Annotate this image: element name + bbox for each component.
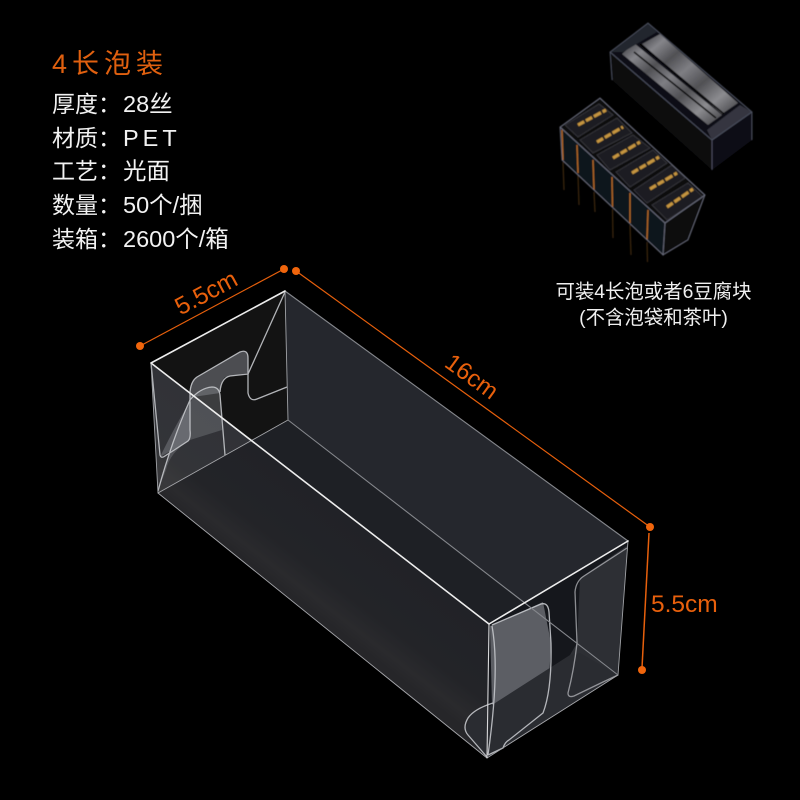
photo: box with tofu blocks [560,98,705,262]
photo: box with tea bags [610,23,752,170]
title: 4长泡装 [52,49,168,79]
box right end [487,541,628,758]
spec: carton: 2600个/箱 [123,226,229,252]
spec: carton [52,226,229,252]
spec: quantity: 数量： [52,192,121,218]
spec: carton: 装箱： [52,226,121,252]
dimension: width 5.5cm: 5.5cm [171,266,242,321]
box back wall [285,291,628,675]
photo caption: (不含泡袋和茶叶) [579,307,728,329]
dimension: width 5.5cm [136,265,288,350]
photo caption [555,281,752,329]
spec: finish: 光面 [123,158,170,184]
spec: thickness [52,91,173,117]
spec: quantity [52,192,203,218]
flap outlines [151,292,627,757]
spec: thickness: 28丝 [123,91,173,117]
spec: finish [52,158,170,184]
dimension: height 5.5cm: 5.5cm [651,591,718,618]
spec: material: PET [123,125,181,151]
box front face [151,363,489,758]
spec: material: 材质： [52,125,121,151]
dimension: height 5.5cm [638,533,718,674]
spec: material [52,125,181,151]
dimension: length 16cm [292,267,654,531]
spec: thickness: 厚度： [52,91,121,117]
box edges [151,291,628,758]
dimension: length 16cm: 16cm [440,349,503,405]
box left end [151,291,288,493]
left end flap [160,352,248,457]
spec: quantity: 50个/捆 [123,192,203,218]
box floor [158,420,618,758]
photo caption: 可装4长泡或者6豆腐块 [555,281,752,303]
main transparent box [151,291,628,758]
spec: finish: 工艺： [52,158,121,184]
specification list [52,91,229,252]
